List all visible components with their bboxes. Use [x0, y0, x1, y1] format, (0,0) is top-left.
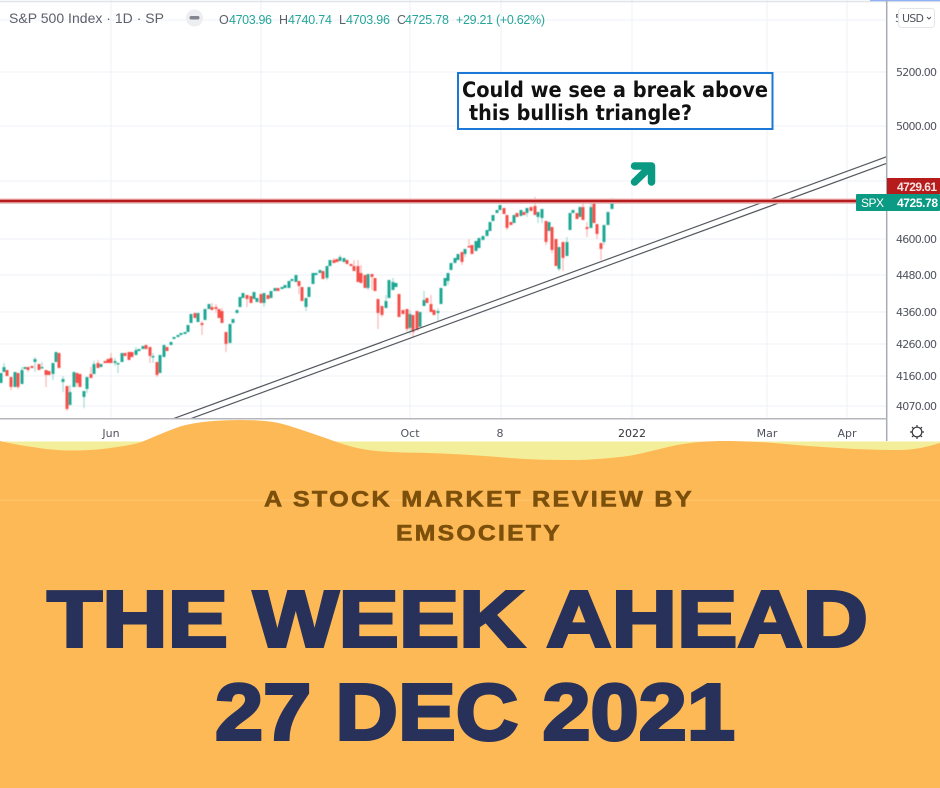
- USD button: [898, 8, 934, 28]
- OHLC values: 4740.74: [288, 13, 332, 27]
- price labels: 4070.00: [896, 400, 937, 413]
- title: [47, 574, 868, 756]
- bullish triangle trendlines: [173, 157, 887, 419]
- title: 27 DEC 2021: [215, 668, 735, 756]
- date labels: 8: [496, 427, 504, 440]
- SPX price tag: [856, 194, 940, 211]
- title: THE WEEK AHEAD: [47, 574, 868, 663]
- date labels: 2022: [618, 427, 646, 440]
- OHLC values: O: [219, 13, 229, 27]
- OHLC values: [219, 13, 545, 27]
- chart legend: [9, 10, 545, 27]
- price labels: 4600.00: [896, 233, 937, 246]
- candlestick wicks: [4, 197, 612, 411]
- subtitle: A STOCK MARKET REVIEW BY: [264, 487, 694, 512]
- price labels: [895, 12, 937, 413]
- orange wave panel: [0, 420, 940, 788]
- callout: bullish triangle question: Could we see a break above: [462, 78, 768, 102]
- date labels: [101, 427, 857, 440]
- SPX price tag: SPX: [861, 196, 884, 210]
- callout: bullish triangle question: this bullish triangle?: [469, 101, 692, 125]
- resistance price tag: 4729.61: [897, 180, 937, 194]
- chart: S&P 500 candlesticks: [1, 197, 612, 411]
- subtitle: EMSOCIETY: [396, 521, 562, 546]
- price labels: 5200.00: [896, 66, 937, 79]
- price labels: 4260.00: [896, 338, 937, 351]
- OHLC values: L: [339, 13, 346, 27]
- USD button: USD: [902, 12, 924, 25]
- time axis: [0, 419, 924, 440]
- OHLC values: +29.21 (+0.62%): [456, 13, 545, 27]
- candlestick bodies: falling: [7, 201, 601, 409]
- OHLC values: 4703.96: [229, 13, 272, 27]
- price labels: 4160.00: [896, 370, 937, 383]
- price labels: 5000.00: [896, 120, 937, 133]
- OHLC values: C: [397, 13, 406, 27]
- price axis: [856, 0, 940, 441]
- yellow wave band: [0, 442, 940, 472]
- date labels: Jun: [101, 427, 120, 440]
- subtitle: [264, 487, 694, 546]
- resistance line: [0, 201, 887, 203]
- icon: collapse button: [186, 10, 203, 26]
- date labels: Oct: [400, 427, 420, 440]
- OHLC values: 4725.78: [405, 13, 449, 27]
- date labels: Mar: [757, 427, 778, 440]
- resistance price tag: [887, 178, 940, 194]
- icon: settings gear: [910, 425, 924, 439]
- candlestick bodies: rising: [1, 200, 612, 405]
- price labels: 4480.00: [896, 269, 937, 282]
- SPX price tag: 4725.78: [897, 196, 938, 210]
- icon: up-right arrow: [634, 166, 652, 182]
- price labels: 4360.00: [896, 306, 937, 319]
- callout: bullish triangle question: [458, 73, 772, 129]
- OHLC values: H: [279, 13, 288, 27]
- index name: S&P 500 Index · 1D · SP: [9, 10, 164, 26]
- OHLC values: 4703.96: [346, 13, 390, 27]
- price labels: 5: [895, 12, 902, 25]
- date labels: Apr: [837, 427, 857, 440]
